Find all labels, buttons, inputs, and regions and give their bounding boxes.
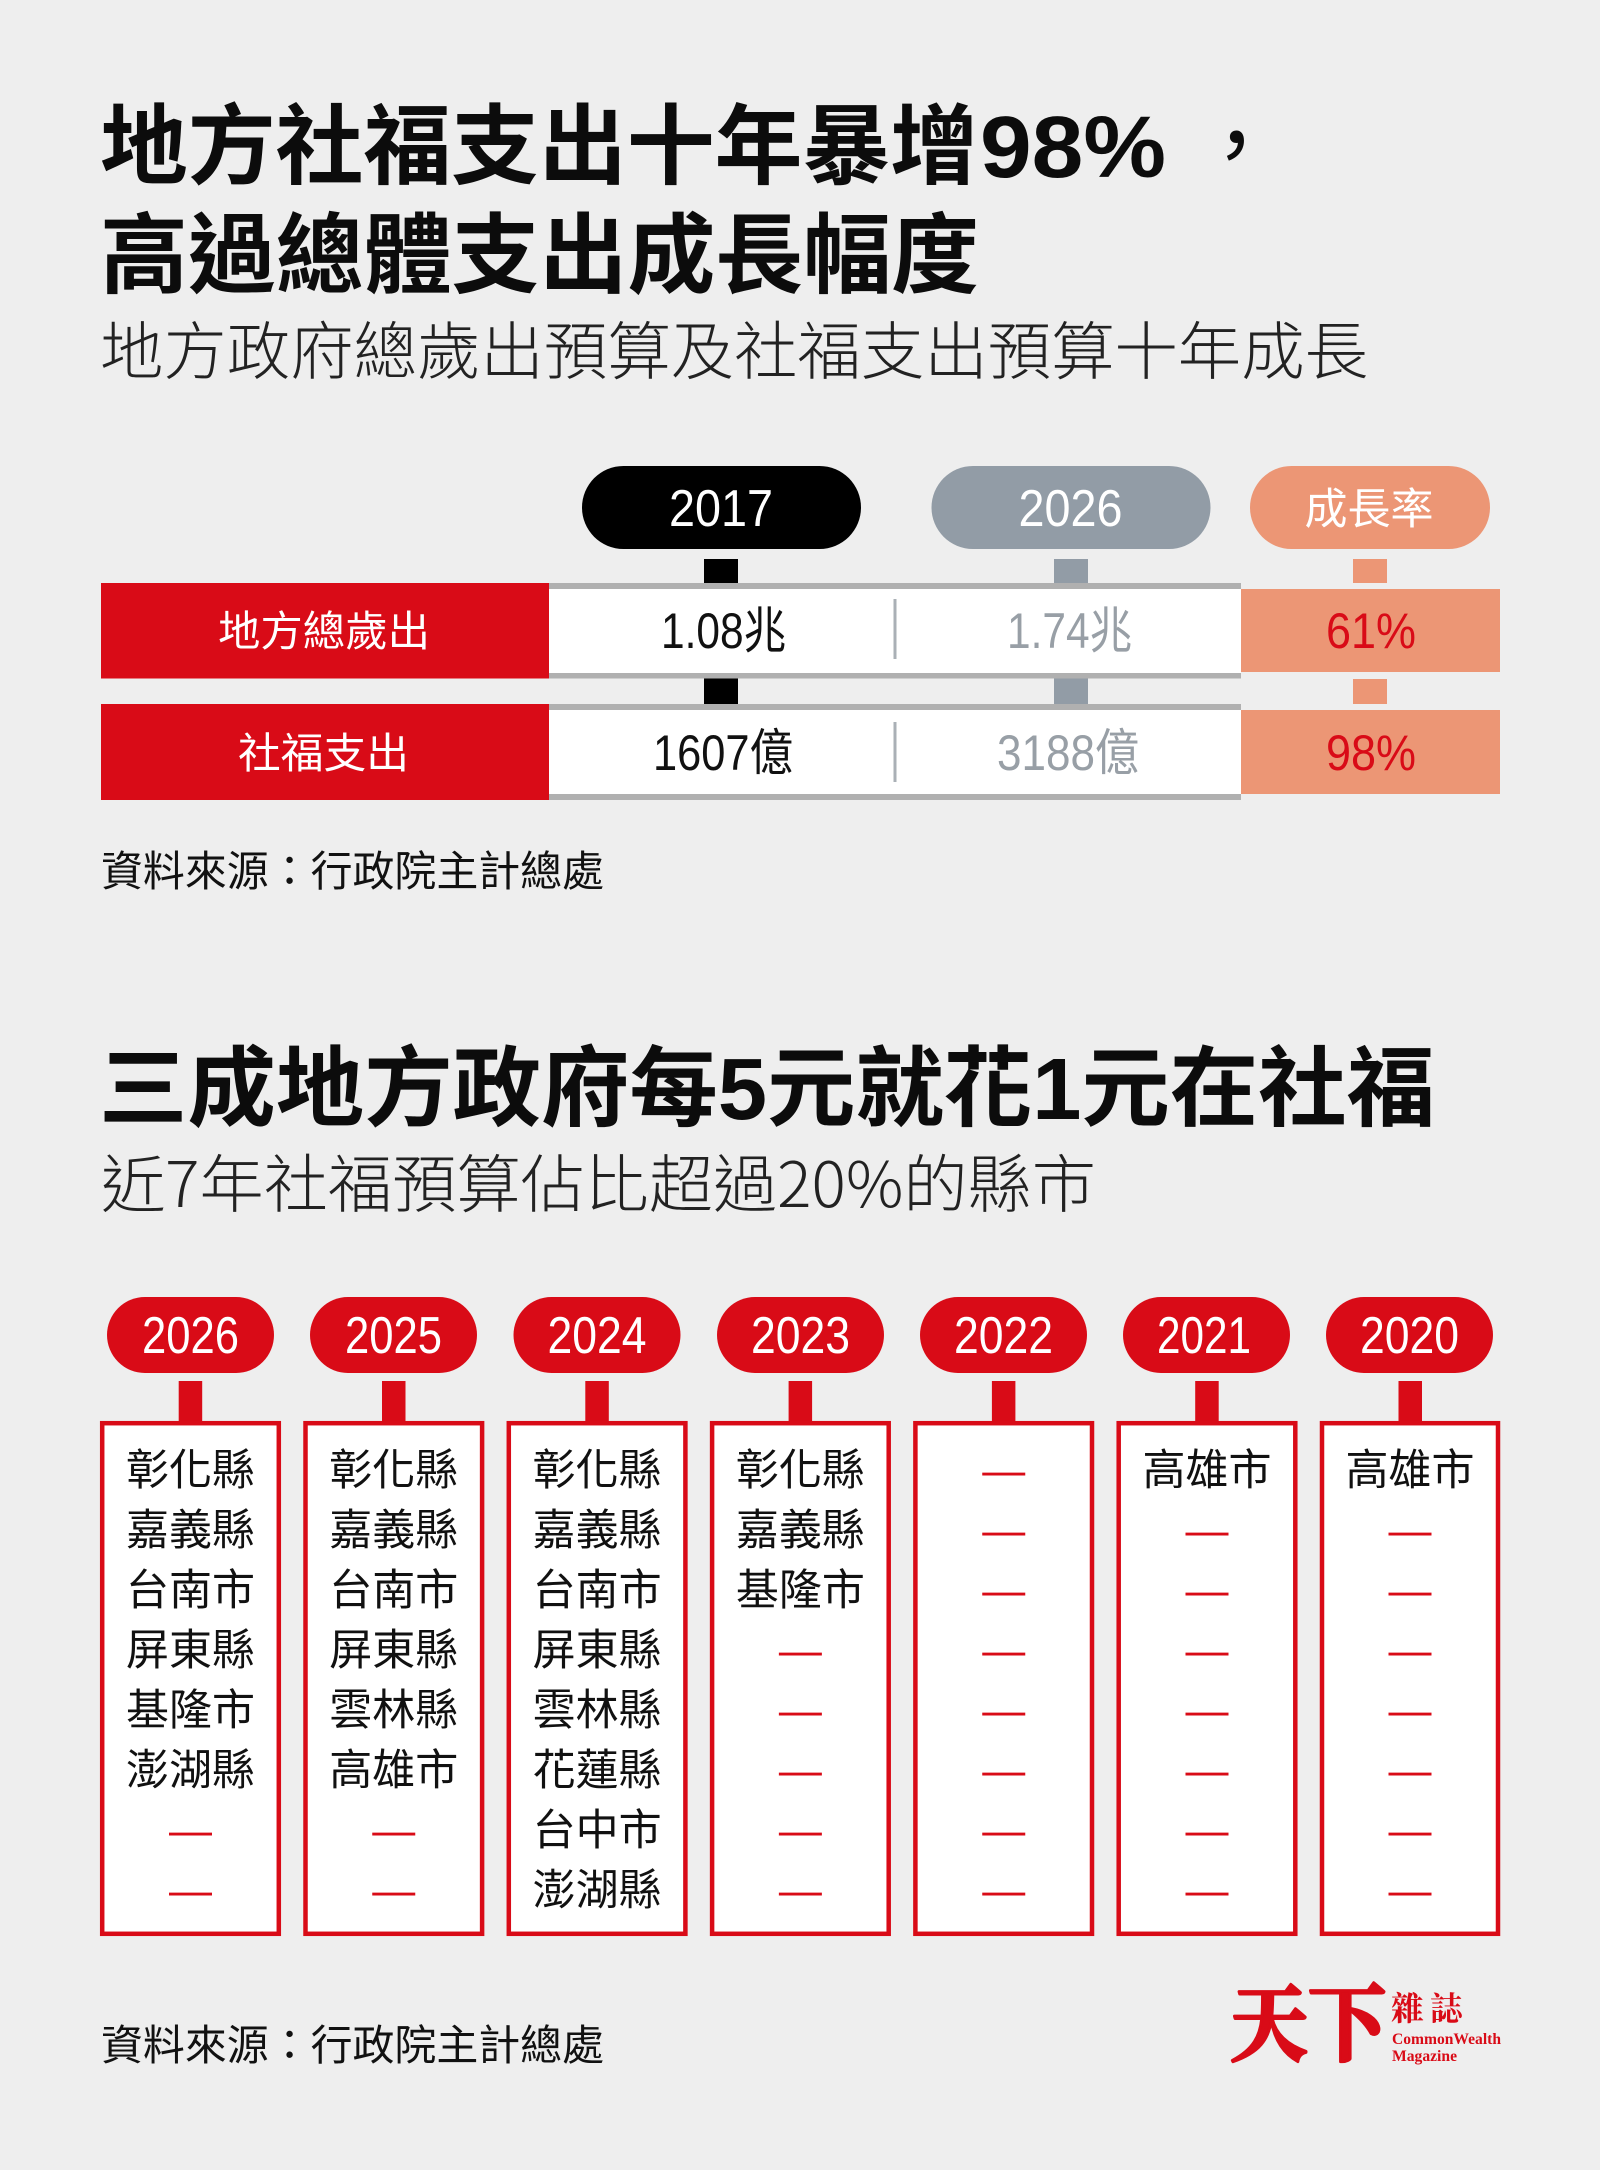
column: 2025: 彰化縣 <box>329 1447 458 1495</box>
column: 2026: 台南市 <box>126 1567 255 1615</box>
column: 2022: — <box>982 1627 1025 1675</box>
column: 2020: — <box>1388 1807 1432 1855</box>
row: social welfare spending: 1607億 <box>653 725 793 781</box>
column: 2022: — <box>982 1747 1025 1795</box>
column: 2025: 高雄市 <box>329 1747 458 1795</box>
panel: counties by year <box>102 1297 1498 1934</box>
column: 2021: — <box>1186 1747 1228 1795</box>
column: 2020 <box>1322 1297 1498 1934</box>
column: 2025 <box>306 1297 482 1934</box>
column: 2021: — <box>1186 1807 1228 1855</box>
title: top heading: 高過總體支出成長幅度 <box>100 207 979 305</box>
header pill: growth rate <box>1250 466 1490 549</box>
column: 2022: — <box>982 1687 1025 1735</box>
column: 2024: 雲林縣 <box>533 1687 662 1735</box>
column: 2025: 嘉義縣 <box>329 1507 458 1555</box>
column: 2023: — <box>779 1687 822 1735</box>
column: 2025: 雲林縣 <box>329 1687 458 1735</box>
column: 2024: 嘉義縣 <box>533 1507 662 1555</box>
column: 2022: 2022 <box>954 1307 1053 1365</box>
header pill: 2017: 2017 <box>669 480 773 538</box>
column: 2024: 屏東縣 <box>533 1627 662 1675</box>
column: 2026: 嘉義縣 <box>126 1507 255 1555</box>
column: 2021: 高雄市 <box>1142 1447 1272 1495</box>
row: social welfare spending: 3188億 <box>997 725 1139 781</box>
column: 2025: 2025 <box>345 1307 442 1365</box>
row: social welfare spending: 社福支出 <box>238 730 409 777</box>
column: 2023: — <box>779 1807 822 1855</box>
header pill: 2026 <box>932 466 1210 549</box>
column: 2022 <box>915 1297 1092 1934</box>
column: 2023: 彰化縣 <box>736 1447 865 1495</box>
column: 2021: — <box>1186 1507 1228 1555</box>
column: 2022: — <box>982 1507 1025 1555</box>
column: 2023: — <box>779 1627 822 1675</box>
source note: bottom: 資料來源：行政院主計總處 <box>101 2022 604 2069</box>
column: 2020: — <box>1388 1627 1432 1675</box>
logo: CommonWealth Magazine: Magazine <box>1392 2048 1457 2065</box>
column: 2022: — <box>982 1807 1025 1855</box>
column: 2023: 2023 <box>751 1307 850 1365</box>
title: second heading: 三成地方政府每5元就花1元在社福 <box>99 1040 1435 1138</box>
column: 2024: 台中市 <box>533 1807 662 1855</box>
logo: CommonWealth Magazine <box>1230 1958 1501 2079</box>
column: 2023 <box>712 1297 889 1934</box>
header pill: 2026: 2026 <box>1018 480 1122 538</box>
column: 2024: 台南市 <box>533 1567 662 1615</box>
row: social welfare spending: 98% <box>1326 725 1416 781</box>
column: 2022: — <box>982 1567 1025 1615</box>
column: 2026: 彰化縣 <box>126 1447 255 1495</box>
subtitle: top: 地方政府總歲出預算及社福支出預算十年成長 <box>100 318 1368 388</box>
column: 2020: — <box>1388 1687 1432 1735</box>
column: 2023: 嘉義縣 <box>736 1507 865 1555</box>
column: 2024: 澎湖縣 <box>533 1867 662 1915</box>
logo: CommonWealth Magazine: 天下 <box>1230 1958 1387 2079</box>
title: top heading <box>100 76 1280 305</box>
column: 2025: 屏東縣 <box>329 1627 458 1675</box>
column: 2021 <box>1119 1297 1295 1934</box>
column: 2026: — <box>169 1807 212 1855</box>
column: 2025: — <box>372 1867 415 1915</box>
title: top heading: 98% <box>980 98 1166 196</box>
column: 2026: 2026 <box>142 1307 239 1365</box>
column: 2026: 屏東縣 <box>126 1627 255 1675</box>
column: 2024 <box>509 1297 685 1934</box>
title: top heading: 地方社福支出十年暴增 <box>100 98 978 196</box>
column: 2020: — <box>1388 1867 1432 1915</box>
column: 2025: — <box>372 1807 415 1855</box>
column: 2026: 澎湖縣 <box>126 1747 255 1795</box>
column: 2020: — <box>1388 1567 1432 1615</box>
row: local total expenditure: 61% <box>1326 603 1416 659</box>
column: 2023: 基隆市 <box>736 1567 865 1615</box>
column: 2023: — <box>779 1747 822 1795</box>
column: 2020: — <box>1388 1507 1432 1555</box>
source note: top: 資料來源：行政院主計總處 <box>101 848 604 895</box>
column: 2020: 2020 <box>1360 1307 1459 1365</box>
header pill: growth rate: 成長率 <box>1304 486 1434 534</box>
row: local total expenditure: 地方總歲出 <box>218 608 430 655</box>
logo: CommonWealth Magazine: CommonWealth <box>1392 2031 1501 2048</box>
column: 2022: — <box>982 1447 1025 1495</box>
column: 2021: — <box>1186 1567 1228 1615</box>
header pill: 2017 <box>582 466 861 549</box>
column: 2021: — <box>1186 1687 1228 1735</box>
column: 2021: — <box>1186 1627 1228 1675</box>
subtitle: second: 近7年社福預算佔比超過20%的縣市 <box>101 1135 1096 1226</box>
column: 2026 <box>102 1297 279 1934</box>
column: 2023: — <box>779 1867 822 1915</box>
column: 2020: 高雄市 <box>1346 1447 1474 1495</box>
title: top heading: ， <box>1192 76 1280 203</box>
column: 2024: 花蓮縣 <box>533 1747 662 1795</box>
column: 2026: 基隆市 <box>126 1687 255 1735</box>
logo: CommonWealth Magazine: 雜 誌 <box>1391 1983 1465 2030</box>
connectors from headers to rows <box>704 559 1387 704</box>
row: local total expenditure <box>101 583 1500 678</box>
row: social welfare spending <box>101 704 1500 800</box>
column: 2020: — <box>1388 1747 1432 1795</box>
column: 2024: 彰化縣 <box>533 1447 662 1495</box>
row: local total expenditure: 1.74兆 <box>1007 603 1132 659</box>
panel: budget comparison table <box>101 466 1500 800</box>
column: 2025: 台南市 <box>329 1567 458 1615</box>
column: 2021: — <box>1186 1867 1228 1915</box>
row: local total expenditure: 1.08兆 <box>661 603 786 659</box>
column: 2024: 2024 <box>548 1307 646 1365</box>
column: 2021: 2021 <box>1157 1307 1251 1365</box>
column: 2026: — <box>169 1867 212 1915</box>
column: 2022: — <box>982 1867 1025 1915</box>
